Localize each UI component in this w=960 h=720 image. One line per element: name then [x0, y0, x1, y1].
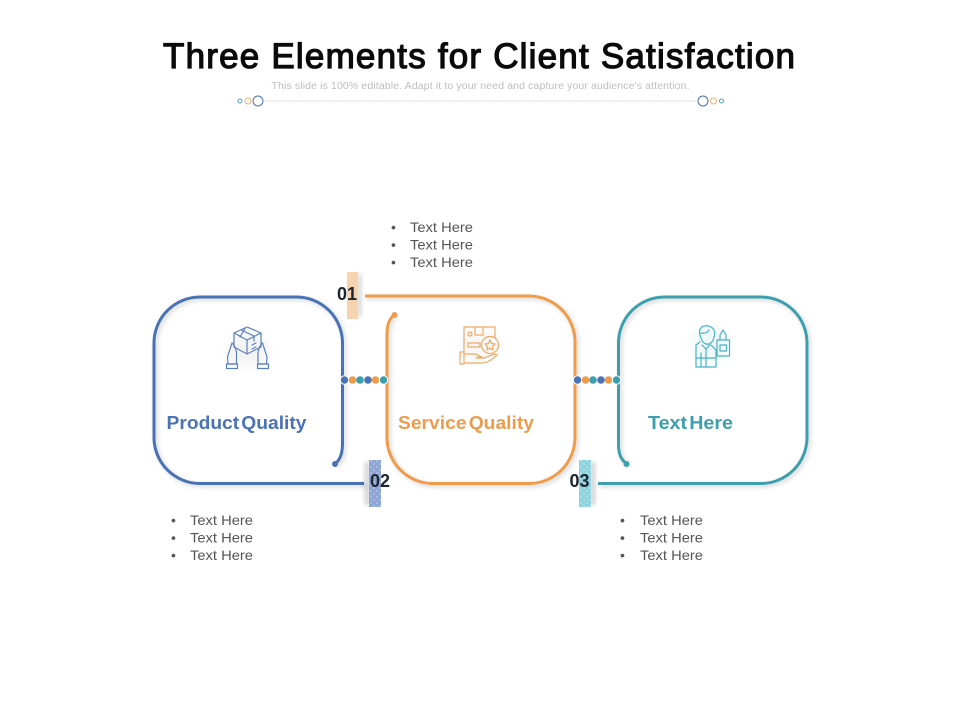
bullet list: element 01: • [391, 254, 396, 270]
title: Three Elements for Client Satisfaction [163, 37, 795, 76]
connector dots: product to service [340, 376, 388, 384]
bullet list: element 02: • [171, 530, 176, 546]
label: service quality: Service Quality [398, 413, 534, 433]
label: text here: Text Here [648, 413, 733, 433]
number tag 01: 01 [337, 284, 357, 304]
subtitle: This slide is 100% editable. Adapt it to your need and capture your audience's attention. [272, 80, 690, 92]
bullet list: element 01 [391, 219, 473, 270]
number tag 02 [365, 460, 390, 507]
label: product quality: Product Quality [166, 413, 306, 433]
panel: service quality [365, 296, 575, 484]
connector dots: service to text here [573, 376, 621, 384]
end dot: service quality [392, 312, 398, 318]
bullet list: element 03 [620, 512, 703, 563]
bullet list: element 02: • [171, 512, 176, 528]
bullet list: element 03: Text Here [640, 512, 703, 528]
title divider with circles [238, 96, 724, 106]
end dot: text here [624, 461, 630, 467]
bullet list: element 03: • [620, 512, 625, 528]
bullet list: element 01: Text Here [410, 254, 473, 270]
bullet list: element 01: Text Here [410, 219, 473, 235]
number tag 03: 03 [569, 471, 590, 491]
panel: text here [598, 297, 807, 484]
number tag 03 [569, 460, 595, 507]
bullet list: element 03: Text Here [640, 547, 703, 563]
outline: product quality [154, 297, 364, 484]
bullet list: element 03: • [620, 547, 625, 563]
icon: parcel with star on hand [458, 327, 502, 364]
bullet list: element 01: Text Here [410, 236, 473, 252]
icon: person with bottle [690, 326, 730, 367]
outline: service quality [365, 296, 575, 484]
icon: box held in hands [226, 327, 270, 368]
panel: product quality [154, 297, 364, 484]
end dot: product quality [332, 461, 338, 467]
bullet list: element 02 [171, 512, 253, 563]
bullet list: element 02: Text Here [190, 547, 253, 563]
bullet list: element 02: Text Here [190, 512, 253, 528]
bullet list: element 02: • [171, 547, 176, 563]
bullet list: element 03: Text Here [640, 530, 703, 546]
number tag 01 [337, 272, 361, 319]
outline: text here [598, 297, 807, 484]
bullet list: element 01: • [391, 219, 396, 235]
bullet list: element 01: • [391, 236, 396, 252]
number tag 02: 02 [370, 471, 390, 491]
bullet list: element 03: • [620, 530, 625, 546]
bullet list: element 02: Text Here [190, 530, 253, 546]
